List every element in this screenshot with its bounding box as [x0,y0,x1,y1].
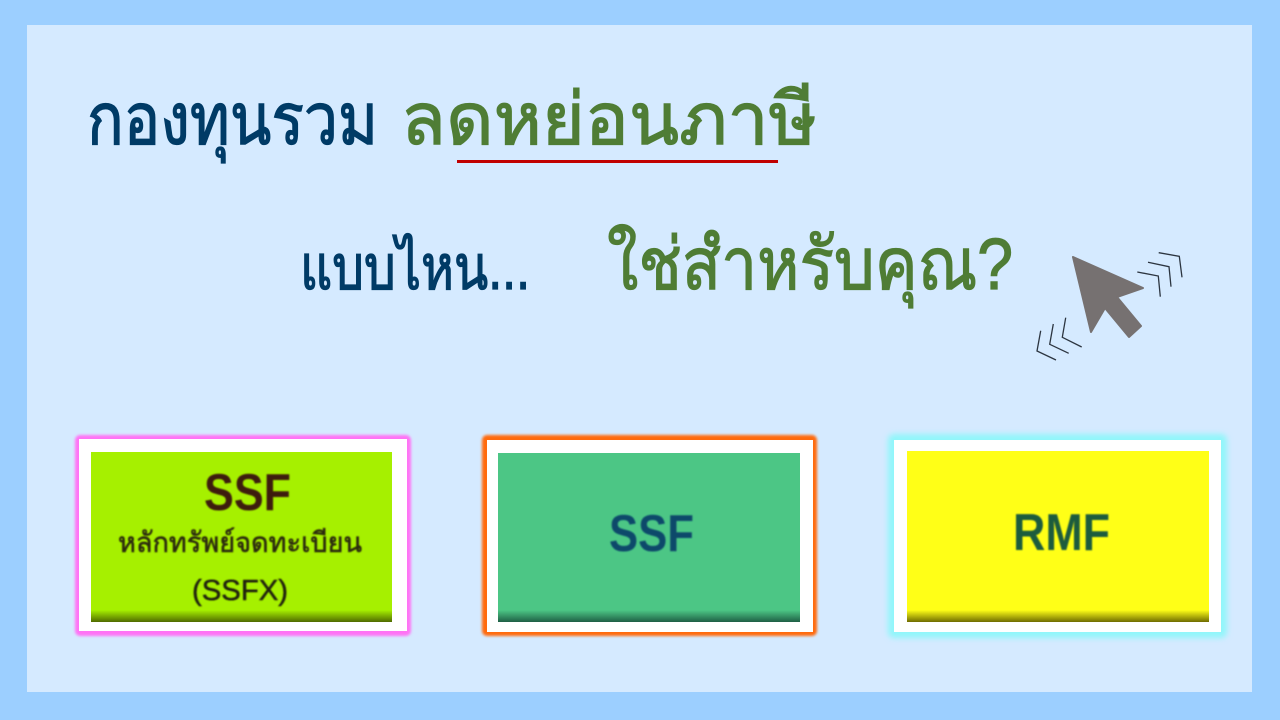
card label: Thai subtitle: หลักทรัพย์จดทะเบียน [118,527,362,558]
card: SSF [482,435,817,636]
title: line 1 [87,80,817,163]
title: line 2: แบบไหน... [300,233,530,303]
card label: SSF: SSF [204,464,291,522]
red underline [457,160,778,163]
title: line 1: กองทุนรวม [87,80,378,163]
card: RMF [888,434,1227,638]
title: line 2: ใช่สำหรับคุณ? [607,224,1013,308]
title: line 1: ลดหย่อนภาษี [401,80,817,160]
icon: cursor arrow [1073,257,1143,337]
card label: RMF: RMF [1013,504,1110,562]
title: line 2 [300,224,1013,308]
card: SSFX [75,435,411,636]
chevrons: upper right [1137,253,1182,297]
icon: mouse cursor with motion chevrons [1037,253,1182,360]
card label: SSF: SSF [609,505,694,563]
chevrons: lower left [1037,318,1082,360]
card label: SSFX: (SSFX) [192,575,288,607]
